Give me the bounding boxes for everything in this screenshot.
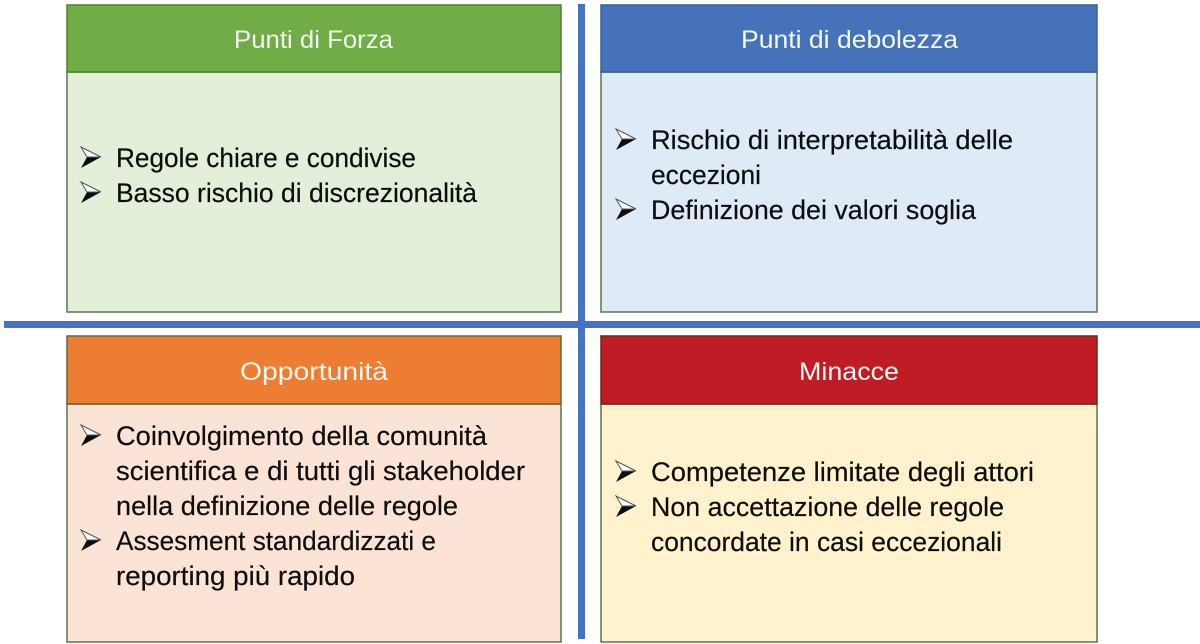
list: punti di debolezza: eccezioni bbox=[651, 160, 761, 190]
list: opportunità bbox=[81, 421, 525, 591]
heading: Opportunità: Opportunità bbox=[240, 358, 388, 386]
divider: vertical axis bbox=[578, 4, 585, 639]
heading: Minacce: Minacce bbox=[799, 358, 899, 386]
list: punti di forza: Regole chiare e condivise bbox=[116, 143, 416, 173]
list: punti di debolezza: Rischio di interpretabilità delle bbox=[651, 125, 1013, 155]
list: opportunità: nella definizione delle regole bbox=[116, 491, 458, 521]
panel body: Punti di Forza bbox=[67, 72, 561, 312]
list: minacce: Non accettazione delle regole bbox=[651, 492, 1004, 522]
divider: horizontal axis bbox=[4, 321, 1200, 328]
list: minacce: Competenze limitate degli attori bbox=[651, 457, 1034, 487]
panel: Punti di Forza bbox=[67, 5, 561, 312]
heading: Punti di debolezza bbox=[601, 5, 1097, 72]
panel body: Opportunità bbox=[67, 404, 561, 642]
panel: Opportunità bbox=[67, 336, 561, 642]
list: opportunità: reporting più rapido bbox=[116, 561, 355, 591]
panel body: Punti di debolezza bbox=[601, 72, 1097, 312]
heading: Punti di debolezza: Punti di debolezza bbox=[741, 26, 958, 54]
list: opportunità: Assesment standardizzati e bbox=[116, 526, 436, 556]
list: opportunità: Coinvolgimento della comunità bbox=[116, 421, 488, 451]
list: opportunità: scientifica e di tutti gli stakeholder bbox=[116, 456, 525, 486]
panel: Minacce bbox=[601, 336, 1097, 642]
heading: Punti di Forza bbox=[67, 5, 561, 72]
list: punti di debolezza: Definizione dei valori soglia bbox=[651, 195, 977, 225]
list: minacce: concordate in casi eccezionali bbox=[651, 527, 1002, 557]
list: minacce bbox=[616, 457, 1034, 557]
panel body: Minacce bbox=[601, 404, 1097, 642]
list: punti di debolezza bbox=[616, 125, 1013, 225]
panel: Punti di debolezza bbox=[601, 5, 1097, 312]
list: punti di forza bbox=[81, 143, 478, 208]
heading: Punti di Forza: Punti di Forza bbox=[234, 26, 393, 54]
list: punti di forza: Basso rischio di discrezionalità bbox=[116, 178, 478, 208]
heading: Opportunità bbox=[67, 336, 561, 404]
heading: Minacce bbox=[601, 336, 1097, 404]
